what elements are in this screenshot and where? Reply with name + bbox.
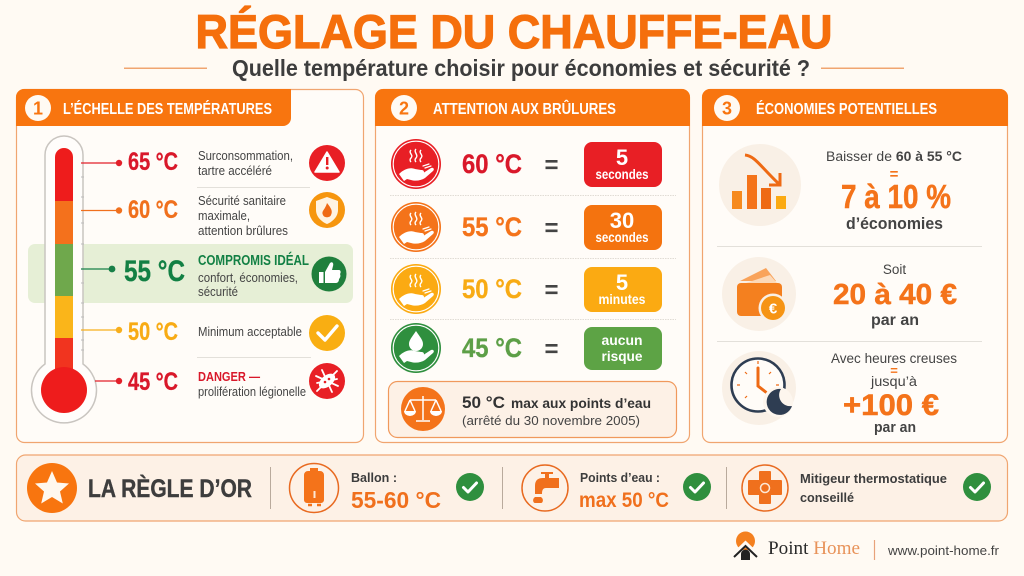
title: RÉGLAGE DU CHAUFFE-EAU [196,5,832,58]
savings: 20 à 40 €: 20 à 40 € [833,279,957,311]
savings: +100 €: +100 € [843,389,939,422]
row 50 °C: Minimum acceptable [198,325,302,339]
callout: arrêté: (arrêté du 30 novembre 2005) [462,413,640,428]
panel: économies potentielles [702,89,1008,442]
rule: points d'eau: max 50 °C [579,489,669,512]
icon: Point Home logo [734,532,757,560]
panel: échelle des températures [16,89,364,442]
icon: scales [401,387,445,431]
icon: warning [309,145,345,181]
row 55 °C = 30 secondes: secondes [596,230,648,245]
row 50 °C = 5 minutes: = [544,277,559,304]
row 55 °C: confort, économies, [198,271,298,285]
icon: check [309,315,345,351]
panel: la règle d'or [16,455,1008,521]
icon: star [27,463,77,513]
rule: ballon: 55-60 °C [351,487,441,513]
panel: attention aux brûlures [375,89,690,442]
panel 2 header: ATTENTION AUX BRÛLURES [433,100,616,118]
savings: 20 à 40 €: Soit [883,262,906,277]
row 60 °C: 60 °C [128,196,178,224]
icon: shield flame [309,192,345,228]
savings: +100 €: Avec heures creuses [831,351,957,366]
icon: wallet: € [769,300,778,318]
row 45 °C = aucun risque: risque [602,348,643,364]
row 55 °C: sécurité [198,285,238,299]
row 45 °C: prolifération légionelle [198,385,306,399]
callout: arrêté [388,382,676,438]
icon: tap [522,465,568,511]
rule: mitigeur [742,465,991,511]
row 60 °C = 5 secondes: 60 °C [462,149,522,179]
icon: water drop hand green [391,323,441,373]
heading: la règle d'or: LA RÈGLE D’OR [88,474,252,503]
savings: +100 €: = [890,363,898,378]
row 60 °C [81,192,345,238]
icon: check [683,473,711,501]
row 60 °C: maximale, [198,209,250,223]
row 55 °C = 30 secondes: 55 °C [462,212,522,242]
footer brand: Point Home [768,538,860,559]
rule: points d'eau: Points d’eau : [580,470,660,485]
row 60 °C = 5 secondes [391,139,662,189]
savings: +100 €: par an [874,420,916,436]
row 45 °C = aucun risque: = [544,336,559,363]
panel 2 header: 2 [399,98,409,118]
icon: clock and moon [722,351,796,425]
row 50 °C = 5 minutes: minutes [598,292,646,307]
savings: 20 à 40 €: par an [871,312,919,329]
panel 1 header: 1 [33,98,43,118]
icon: thumbs up [312,256,346,292]
row 50 °C = 5 minutes: 5 [616,270,628,295]
panel 1 header: L’ÉCHELLE DES TEMPÉRATURES [63,101,272,118]
row 55 °C = 30 secondes: 30 [610,208,634,233]
panel 3 header: ÉCONOMIES POTENTIELLES [756,101,937,118]
row 60 °C: Sécurité sanitaire [198,194,286,208]
panel 3 header [702,89,1008,126]
savings: 7 à 10 %: 7 à 10 % [841,178,951,215]
rule: ballon: Ballon : [351,470,397,485]
rule: ballon [290,464,484,513]
row 55 °C: COMPROMIS IDÉAL [198,252,309,269]
savings: 7 à 10 %: Baisser de 60 à 55 °C [826,149,962,164]
savings: 7 à 10 % [719,144,962,233]
row 60 °C = 5 secondes: = [544,152,559,179]
icon: thermostatic mixer [742,465,788,511]
row 50 °C = 5 minutes [391,264,662,314]
icon: hot hand orange [391,202,441,252]
savings: 7 à 10 %: d’économies [846,215,943,233]
row 45 °C = aucun risque: aucun [602,332,642,348]
panel 1 header [16,89,291,126]
savings: +100 € [722,351,957,436]
icon: hot hand yellow [391,264,441,314]
row 65 °C [81,145,345,181]
row 65 °C: Surconsommation, [198,149,293,163]
savings: 20 à 40 € [722,257,957,331]
row 45 °C: DANGER — [198,369,260,384]
row 55 °C = 30 secondes [391,202,662,252]
row 55 °C: 55 °C [124,255,185,288]
row 55 °C [81,252,346,299]
row 50 °C = 5 minutes: 50 °C [462,274,522,304]
highlight band 55 °C [28,244,353,303]
rule: mitigeur: conseillé [800,490,854,505]
subtitle: Quelle température choisir pour économies et sécurité ? [232,55,810,81]
thermometer [31,136,97,423]
rule: mitigeur: Mitigeur thermostatique [800,471,947,486]
row 65 °C: 65 °C [128,148,178,176]
row 45 °C [95,363,345,399]
row 65 °C: tartre accéléré [198,164,272,178]
row 60 °C: attention brûlures [198,224,288,238]
row 60 °C = 5 secondes: 5 [616,145,628,170]
icon: wallet [722,257,796,331]
footer brand [734,532,999,560]
icon: falling bars [719,144,801,226]
footer brand: www.point-home.fr [887,544,999,558]
row 50 °C [81,315,345,351]
row 45 °C: 45 °C [128,368,178,396]
row 55 °C = 30 secondes: = [544,215,559,242]
icon: water heater [290,464,338,512]
row 45 °C = aucun risque: 45 °C [462,333,522,363]
row 50 °C: 50 °C [128,318,178,346]
icon: check [456,473,484,501]
row 60 °C = 5 secondes: secondes [596,167,648,182]
panel 3 header: 3 [722,98,732,118]
icon: bacteria [309,363,345,399]
savings: 7 à 10 %: = [890,166,899,183]
callout: arrêté: max aux points d’eau [511,395,651,411]
icon: hot hand red [391,139,441,189]
savings: +100 €: jusqu’à [870,374,918,389]
row 45 °C = aucun risque [391,323,662,373]
callout: arrêté: 50 °C [462,393,505,412]
rule: points d'eau [522,465,711,512]
icon: check [963,473,991,501]
panel 2 header [375,89,690,126]
